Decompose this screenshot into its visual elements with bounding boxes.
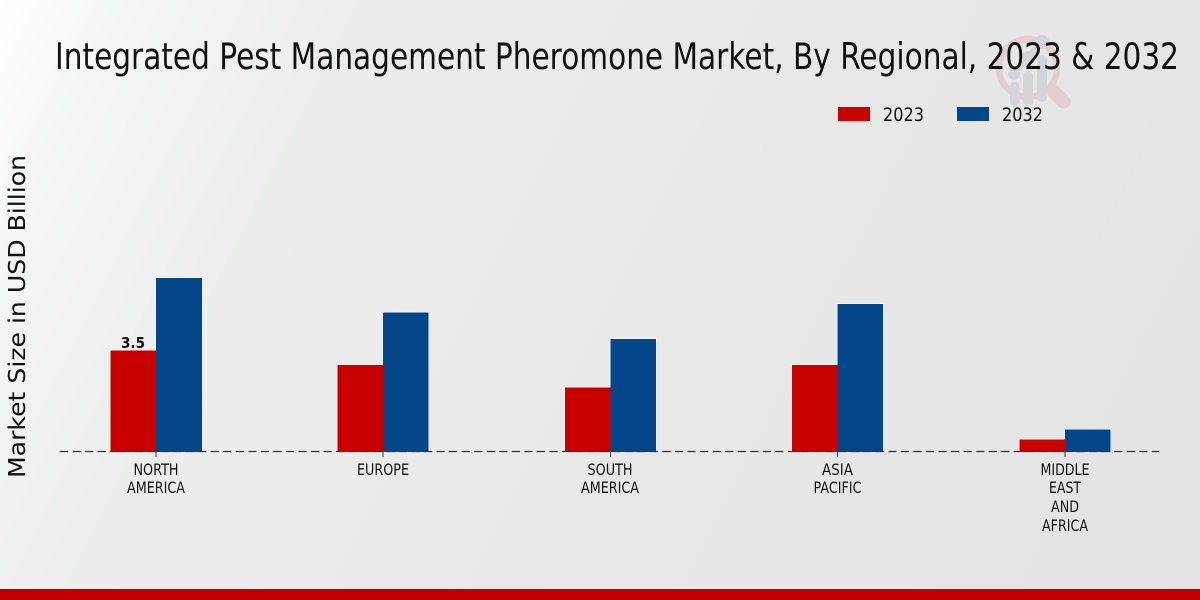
- category label: Middle East and Africa: AND: [1051, 497, 1079, 516]
- legend label: 2023: 2023: [883, 104, 924, 126]
- category label: Asia Pacific: PACIFIC: [814, 478, 862, 497]
- category label: North America: AMERICA: [127, 478, 185, 497]
- category label: South America: AMERICA: [581, 478, 639, 497]
- legend swatch: 2032: [957, 107, 989, 121]
- bars: North America: [110, 278, 202, 452]
- legend label: 2032: 2032: [1002, 104, 1043, 126]
- bars: Europe: [338, 312, 428, 452]
- bars: Asia Pacific: [792, 304, 883, 452]
- category label: Middle East and Africa: AFRICA: [1042, 516, 1088, 535]
- icon: watermark magnifier: [999, 35, 1064, 106]
- category label: Asia Pacific: ASIA: [822, 460, 853, 479]
- category label: South America: [581, 460, 639, 497]
- category label: Middle East and Africa: EAST: [1049, 478, 1081, 497]
- bars: Middle East and Africa: [1020, 430, 1110, 452]
- axis baseline: [60, 450, 1159, 452]
- y-axis label: Market Size in USD Billion: [3, 155, 31, 478]
- value label: 3.5: 3.5: [121, 334, 145, 352]
- category label: Middle East and Africa: [1040, 460, 1090, 535]
- bars: South America: [565, 339, 656, 452]
- legend swatch: 2023: [838, 107, 870, 121]
- legend: [838, 104, 1043, 126]
- tick marks: [156, 452, 1065, 457]
- category label: North America: [127, 460, 185, 497]
- category label: Europe: EUROPE: [357, 460, 409, 479]
- footer bar: [0, 589, 1200, 600]
- bar chart: [60, 278, 1159, 457]
- category label: South America: SOUTH: [588, 460, 632, 479]
- category label: Asia Pacific: [814, 460, 862, 497]
- category label: North America: NORTH: [134, 460, 178, 479]
- category label: Middle East and Africa: MIDDLE: [1040, 460, 1090, 479]
